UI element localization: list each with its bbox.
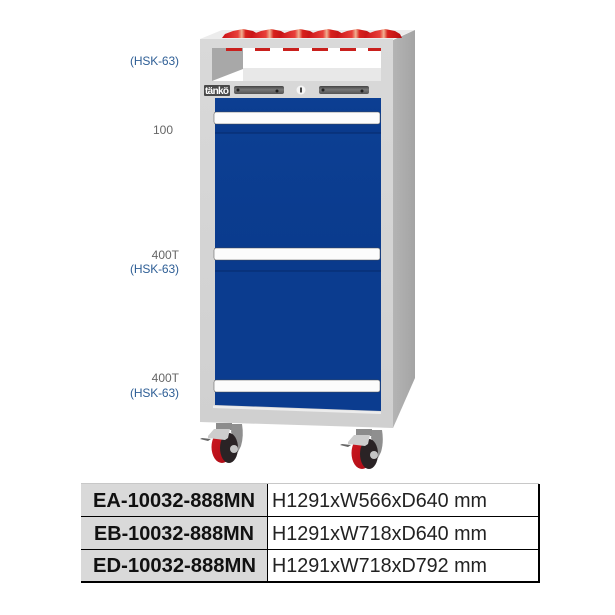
casters <box>200 423 383 469</box>
table row 3: ED-10032-888MN <box>93 555 256 577</box>
table backgrounds <box>81 484 267 581</box>
drawer 2 <box>214 132 381 271</box>
cabinet side panel <box>393 30 415 428</box>
labels: drawer specifications <box>130 54 180 400</box>
table row 2 <box>94 523 487 545</box>
table row 2: H1291xW718xD640 mm <box>272 523 487 545</box>
tool holder undersides <box>226 48 381 51</box>
label: drawer 3 height and holder type: (HSK-63) <box>130 386 179 400</box>
caster: left <box>200 423 243 463</box>
label: drawer 2 height and holder type <box>130 248 180 276</box>
cabinet top surface <box>200 30 415 39</box>
cabinet <box>200 29 415 428</box>
dimensions table <box>81 483 540 583</box>
table row 1: H1291xW566xD640 mm <box>272 490 487 512</box>
label: drawer 3 height and holder type: 400T <box>152 371 180 385</box>
drawer bank <box>213 98 381 414</box>
handle: left <box>234 86 284 94</box>
brand logo: tänkö <box>205 86 229 97</box>
table row 2: EB-10032-888MN <box>94 523 254 545</box>
label: top tray holder type: (HSK-63) <box>130 54 179 68</box>
label: drawer 1 height: 100 <box>153 123 173 137</box>
label: drawer 2 height and holder type: 400T <box>152 248 180 262</box>
table row 1: EA-10032-888MN <box>93 490 255 512</box>
cabinet front frame <box>200 39 393 428</box>
open tray compartment <box>212 48 381 81</box>
table row 3 <box>93 555 487 577</box>
caster: right <box>340 429 383 469</box>
handle: right <box>319 86 369 94</box>
table row 1 <box>93 490 487 512</box>
lock <box>296 86 306 94</box>
drawer 3 <box>213 270 381 414</box>
drawer 1 <box>214 98 381 133</box>
table borders <box>81 483 540 583</box>
label: drawer 2 height and holder type: (HSK-63) <box>130 262 179 276</box>
tool holders on top <box>222 29 402 38</box>
label: drawer 3 height and holder type <box>130 371 180 400</box>
table row 3: H1291xW718xD792 mm <box>272 555 487 577</box>
